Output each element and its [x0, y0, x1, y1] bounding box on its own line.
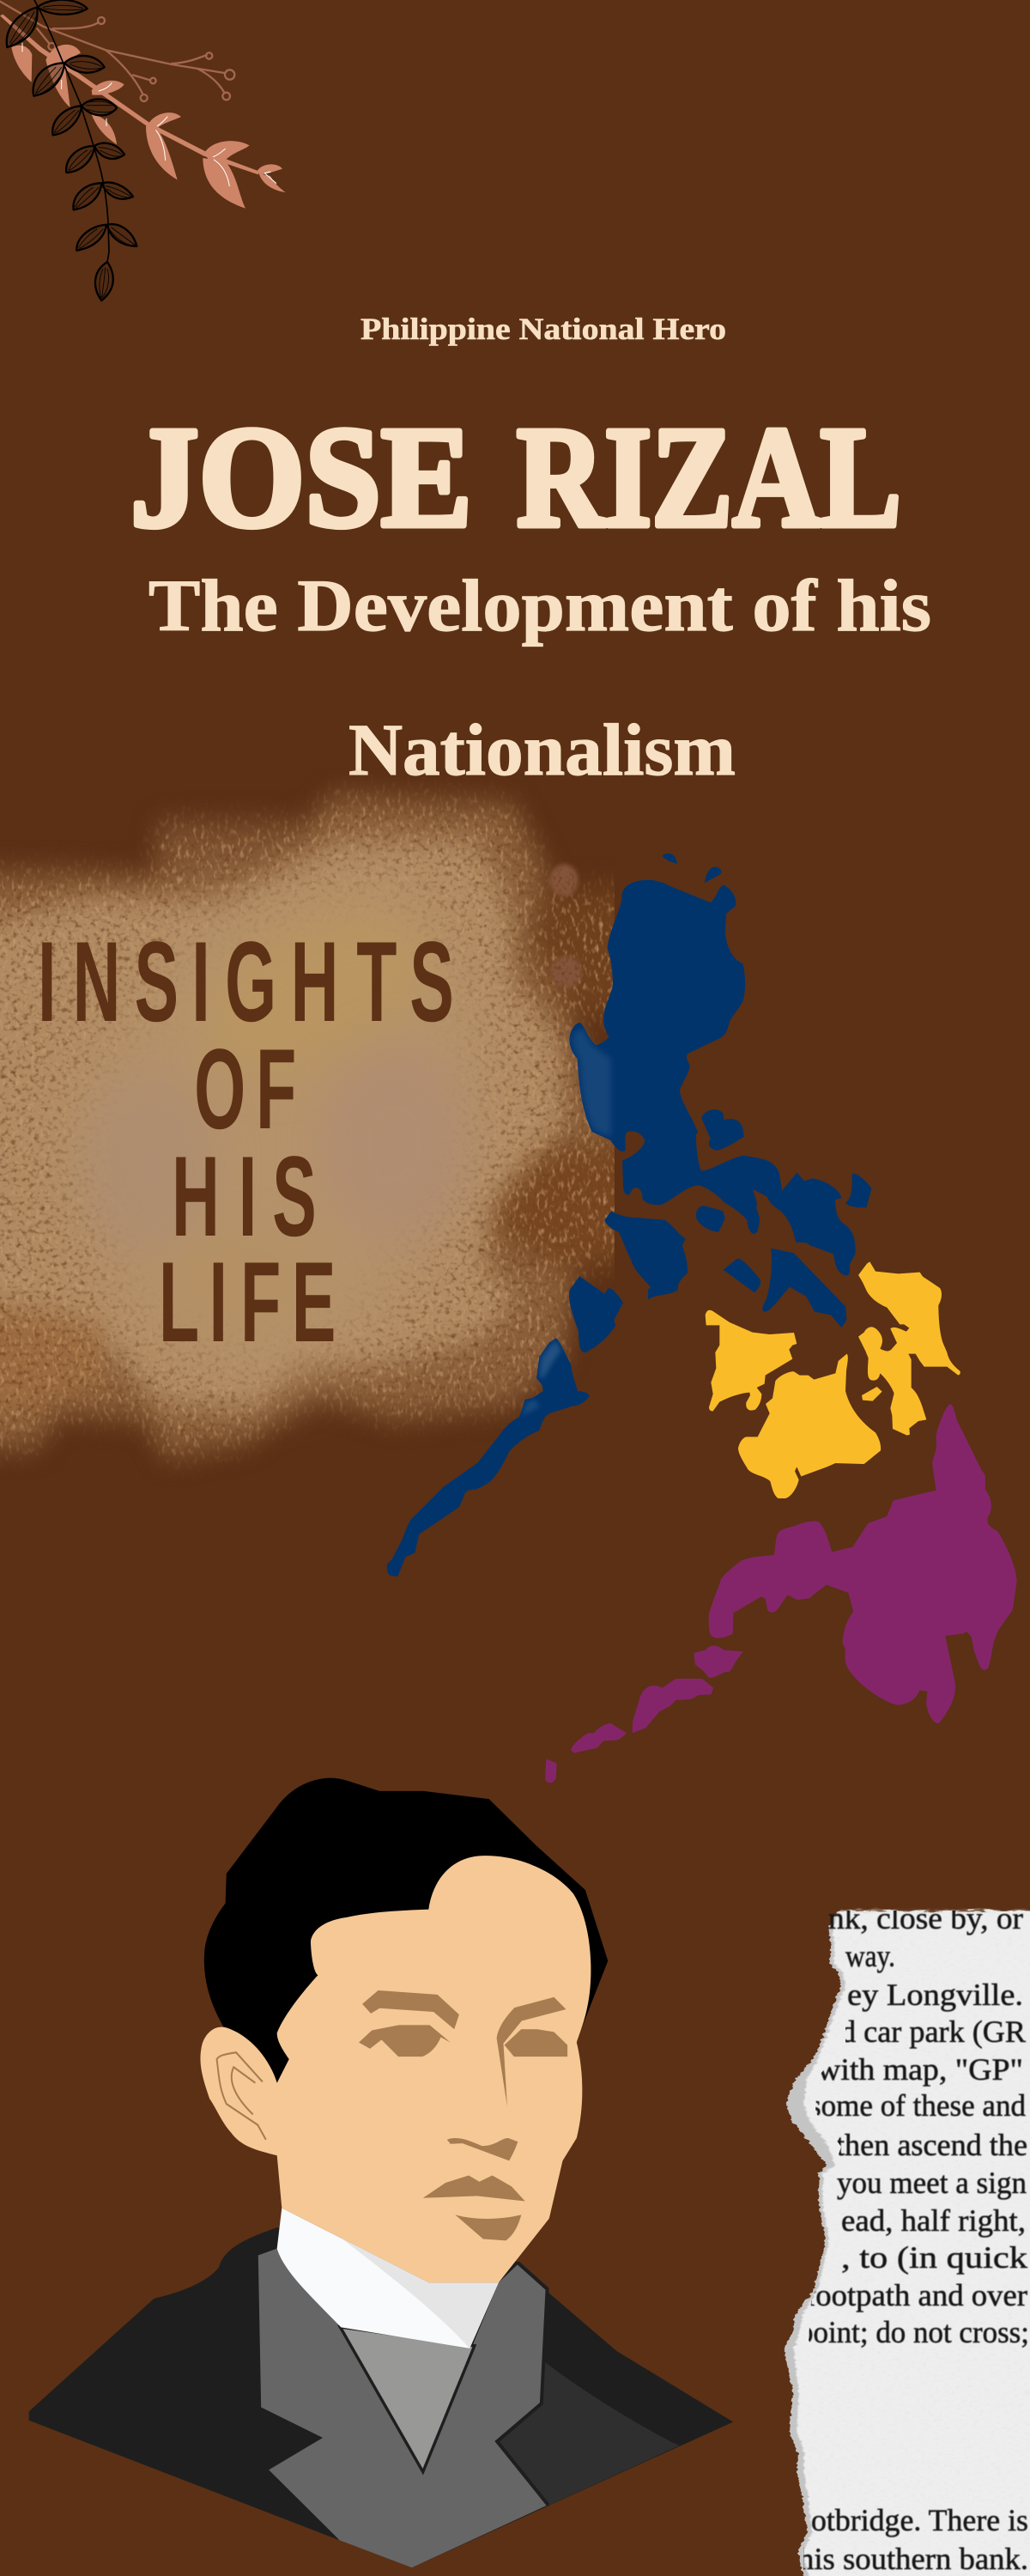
clipping text: footpath and over — [805, 2278, 1027, 2312]
coat right panel — [496, 2361, 679, 2505]
torn paper sheet — [784, 1911, 1030, 2576]
salmon leaves — [0, 15, 286, 209]
clipping text: ey Longville. — [847, 1978, 1023, 2012]
Luzon — [569, 880, 856, 1275]
clipping text: nk, close by, or — [828, 1901, 1023, 1935]
subtitle: The Development of his — [148, 564, 931, 647]
black vine — [7, 0, 136, 301]
ear lines — [217, 2052, 266, 2140]
clipping text — [798, 1901, 1029, 2576]
Mindanao, purple — [545, 1404, 1017, 1783]
heading: INSIGHTS OF HIS LIFE: LIFE — [159, 1239, 336, 1366]
clipping text: with map, "GP" — [817, 2052, 1023, 2087]
eyebrow: Philippine National Hero: Philippine National Hero — [360, 312, 726, 346]
clipping text: some of these and — [809, 2088, 1026, 2123]
translucent canvas overlap on Luzon — [573, 1026, 610, 1137]
clipping text: his southern bank. — [798, 2542, 1028, 2576]
gold lower glow — [158, 1239, 315, 1324]
icon: salmon and black botanical sprig — [0, 0, 286, 301]
facial features — [359, 1990, 567, 2240]
map: Philippines — [387, 854, 1017, 1783]
mauve right glow — [412, 1133, 470, 1231]
textured paint spots — [550, 864, 581, 988]
gold glow — [230, 938, 405, 1047]
burlap base with washes and brown patches — [0, 796, 631, 1455]
subtitle: Nationalism — [348, 708, 736, 791]
cravat — [340, 2327, 475, 2472]
clipping text: ead, half right, — [841, 2203, 1026, 2238]
leaf highlights — [22, 43, 276, 186]
torn newspaper clipping — [784, 1901, 1030, 2576]
clipping text: you meet a sign — [837, 2166, 1027, 2200]
Luzon and Visayas north, navy — [569, 854, 871, 1352]
heading: INSIGHTS OF HIS LIFE: INSIGHTS — [38, 919, 454, 1046]
heading: INSIGHTS OF HIS LIFE: OF — [194, 1026, 296, 1153]
title: JOSE RIZAL: JOSE — [130, 398, 472, 557]
clipping text: ed car park (GR — [827, 2014, 1026, 2049]
heading: INSIGHTS OF HIS LIFE — [38, 919, 454, 1366]
textured canvas blob — [0, 796, 631, 1455]
lapels — [258, 2249, 548, 2567]
clipping text: then ascend the — [836, 2128, 1027, 2162]
clipping text: way. — [845, 1939, 895, 1973]
face and ear — [200, 1856, 591, 2282]
title: JOSE RIZAL — [130, 398, 901, 557]
Visayas, yellow — [706, 1261, 960, 1498]
lapel outline — [497, 2263, 548, 2505]
portrait: Jose Rizal — [29, 1778, 733, 2567]
coat — [29, 2227, 733, 2567]
title: JOSE RIZAL: RIZAL — [517, 398, 901, 557]
smooth centre wash — [59, 872, 485, 1385]
mauve left glow — [92, 1170, 106, 1185]
clipping text: point; do not cross; — [798, 2315, 1029, 2349]
heading: INSIGHTS OF HIS LIFE: HIS — [172, 1133, 317, 1261]
collar — [277, 2208, 499, 2348]
subtitle — [148, 564, 931, 791]
clipping text: otbridge. There is — [811, 2503, 1028, 2537]
clipping text: , to (in quick — [841, 2240, 1027, 2275]
Palawan, navy — [387, 1338, 590, 1577]
faded branch with buds — [0, 2, 234, 101]
hair — [204, 1778, 608, 2083]
collar shadow — [341, 2238, 499, 2348]
